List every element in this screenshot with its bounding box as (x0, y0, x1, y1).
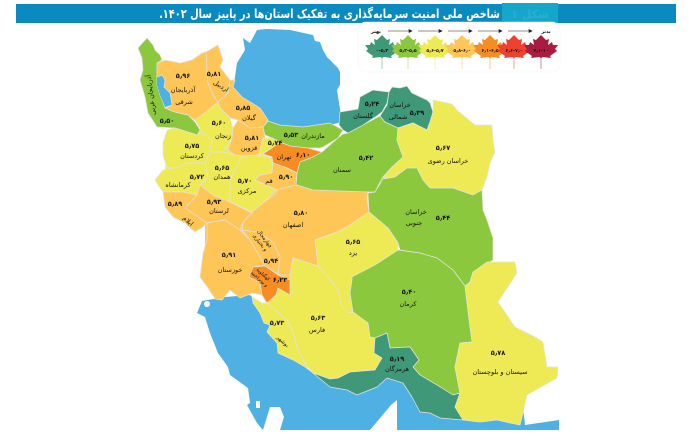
province: Hormozgan (313, 333, 463, 420)
province labels and index values: چهارمحال (255, 229, 273, 249)
province labels and index values: شرقی (175, 98, 193, 106)
province labels and index values: اصفهان (283, 221, 303, 229)
province: Gilan (218, 80, 268, 128)
province: Esfahan (242, 185, 369, 275)
province labels and index values: کهگیلویه (255, 266, 272, 283)
province labels and index values: ۵٫۷۰ (238, 177, 252, 185)
province labels and index values: خراسان رضوی (428, 157, 468, 165)
province labels and index values: ۵٫۶۷ (436, 144, 450, 152)
province labels and index values: سیستان و بلوچستان (472, 368, 528, 376)
province: Sistan and Baluchestan (455, 262, 558, 425)
province labels and index values: یزد (349, 249, 357, 257)
province: Kurdistan (163, 128, 212, 168)
legend leaf: up to 5.3: ۰-۵٫۳ (376, 48, 388, 54)
interior underlay: north-east (300, 130, 395, 190)
province labels and index values: ۵٫۴۲ (359, 154, 373, 162)
province: Alborz (259, 138, 280, 155)
legend leaf: 6.1 to 6.5: ۶٫۱-۶٫۵ (481, 48, 499, 54)
province labels and index values: ۶٫۲۳ (273, 276, 287, 284)
province labels and index values: گلستان (353, 112, 374, 120)
legend leaf: 6.1 to 6.5 (473, 35, 507, 69)
province labels and index values: ۵٫۶۵ (346, 238, 360, 246)
province labels and index values: ۵٫۴۴ (436, 214, 450, 222)
province: Kerman (350, 250, 472, 395)
province: Ilam (163, 192, 207, 232)
province labels and index values: لرستان (209, 207, 229, 215)
interior underlay: south-west (170, 188, 320, 295)
province labels and index values: و بویراحمد (249, 270, 269, 289)
province labels and index values: ۵٫۸۱ (245, 134, 259, 142)
province: Yazd (315, 212, 398, 313)
province labels and index values: مازندران (301, 132, 325, 140)
province: Semnan (296, 116, 403, 192)
Persian Gulf and Sea of Oman (197, 295, 559, 430)
province map (138, 38, 558, 425)
province labels and index values: هرمزگان (385, 365, 410, 373)
province labels and index values: ۵٫۷۳ (270, 319, 284, 327)
province labels and index values: ۵٫۷۴ (268, 139, 282, 147)
province: Tehran (263, 142, 322, 173)
legend arrows (388, 30, 532, 32)
legend leaf: 5.6 to 5.7: ۵٫۶-۵٫۷ (426, 49, 444, 54)
province: Razavi Khorasan (383, 100, 495, 195)
province labels and index values: خراسان (405, 208, 427, 216)
province labels and index values: خراسان (389, 101, 411, 109)
province labels and index values (143, 70, 528, 376)
province labels and index values: ۵٫۷۲ (190, 173, 204, 181)
province labels and index values: ۵٫۲۴ (365, 100, 379, 108)
legend leaf: 5.6 to 5.7 (418, 35, 452, 69)
figure label tab: شکل ۱ (511, 8, 549, 21)
province: East Azerbaijan (157, 51, 218, 122)
legend label: worse: بدتر (540, 30, 551, 35)
province labels and index values: ۵٫۵۳ (284, 131, 298, 139)
province labels and index values: ۵٫۹۶ (176, 72, 190, 80)
province labels and index values: قم (265, 177, 273, 185)
province labels and index values: کرمان (400, 300, 417, 308)
province: Chaharmahal and Bakhtiari (242, 230, 280, 274)
province: Markazi (230, 155, 277, 212)
province: Kohgiluyeh and Boyer-Ahmad (249, 266, 290, 303)
figure label tab (502, 3, 558, 23)
province: Fars (267, 258, 382, 379)
province labels and index values: ۵٫۹۰ (279, 173, 293, 181)
province labels and index values: ۵٫۸۹ (168, 200, 182, 208)
province labels and index values: ۵٫۸۰ (294, 209, 308, 217)
legend leaf: 6.6 to 7.0: ۶٫۶-۷٫۰ (505, 49, 523, 54)
province: Khuzestan (200, 220, 265, 300)
province: North Khorasan (380, 86, 433, 130)
province labels and index values: همدان (213, 173, 231, 181)
Lake Urmia (157, 75, 172, 107)
province labels and index values: مرکزی (238, 187, 256, 195)
province: Zanjan (195, 102, 233, 152)
province labels and index values: ۵٫۳۹ (410, 109, 424, 117)
legend leaf: 5.4 to 5.5: ۵٫۴-۵٫۵ (399, 48, 417, 54)
province labels and index values: ۵٫۷۵ (185, 142, 199, 150)
province labels and index values: گیلان (242, 114, 257, 122)
province labels and index values: تهران (277, 153, 292, 161)
province labels and index values: شمالی (389, 113, 407, 121)
province: South Khorasan (368, 168, 493, 286)
province labels and index values: ۵٫۹۱ (222, 251, 236, 259)
province labels and index values: ایلام (181, 214, 195, 228)
legend leaf: 5.8 to 6.0: ۵٫۸-۶٫۰ (453, 49, 471, 54)
province labels and index values: ۵٫۴۰ (402, 288, 416, 296)
Caspian Sea (233, 29, 342, 128)
legend leaf: 5.8 to 6.0 (445, 35, 479, 69)
province labels and index values: زنجان (215, 132, 231, 140)
province labels and index values: ۶٫۱۰ (296, 151, 310, 159)
province: Bushehr (252, 297, 313, 373)
province: Ardabil (206, 45, 230, 102)
province: Qom (255, 163, 297, 190)
province labels and index values: ۵٫۹۴ (264, 257, 278, 265)
legend frame (358, 22, 560, 72)
province labels and index values: سمنان (333, 166, 351, 174)
province: Lorestan (185, 185, 252, 230)
province labels and index values: قزوین (241, 144, 257, 152)
legend leaf: 7.1 to 10: ۷٫۱-۱۰ (533, 48, 549, 54)
province labels and index values: ۵٫۹۳ (207, 198, 221, 206)
province labels and index values: خوزستان (218, 266, 242, 274)
legend leaf: 7.1 to 10 (524, 35, 558, 69)
province labels and index values: ۵٫۶۵ (215, 164, 229, 172)
legend leaf: 5.4 to 5.5 (391, 35, 425, 69)
province labels and index values: اردبیل (212, 78, 230, 94)
interior underlay: west (165, 125, 295, 195)
province labels and index values: کردستان (180, 152, 205, 160)
legend leaf: 6.6 to 7.0 (497, 35, 531, 69)
province labels and index values: فارس (309, 326, 325, 334)
province: Golestan (339, 90, 389, 133)
province: Hamedan (200, 152, 243, 202)
province labels and index values: جنوبی (406, 219, 422, 227)
legend leaf: up to 5.3 (365, 35, 399, 69)
province labels and index values: ۵٫۸۵ (236, 104, 250, 112)
province labels and index values: ۵٫۸۱ (207, 70, 221, 78)
province labels and index values: ۵٫۷۸ (491, 349, 505, 357)
legend (358, 22, 560, 72)
province: Qazvin (228, 120, 265, 156)
title: شاخص ملی امنیت سرمایه‌گذاری به تفکیک استان‌ها در پاییز سال ۱۴۰۲. (159, 6, 500, 21)
province labels and index values: ۵٫۱۹ (390, 355, 404, 363)
province: West Azerbaijan (138, 38, 200, 135)
header bar (16, 4, 676, 23)
province labels and index values: ۵٫۶۰ (212, 119, 226, 127)
province labels and index values: آذربایجان غربی (143, 73, 157, 116)
province: Kermanshah (155, 163, 208, 195)
province labels and index values: و بختیاری (251, 233, 269, 253)
province labels and index values: ۵٫۵۰ (160, 117, 174, 125)
province labels and index values: ۵٫۶۳ (311, 314, 325, 322)
province: Mazandaran (263, 121, 343, 148)
province labels and index values: آذربایجان (171, 85, 196, 94)
legend label: better: بهتر (370, 30, 381, 35)
province labels and index values: بوشهر (274, 334, 290, 349)
province labels and index values: کرمانشاه (165, 181, 191, 189)
